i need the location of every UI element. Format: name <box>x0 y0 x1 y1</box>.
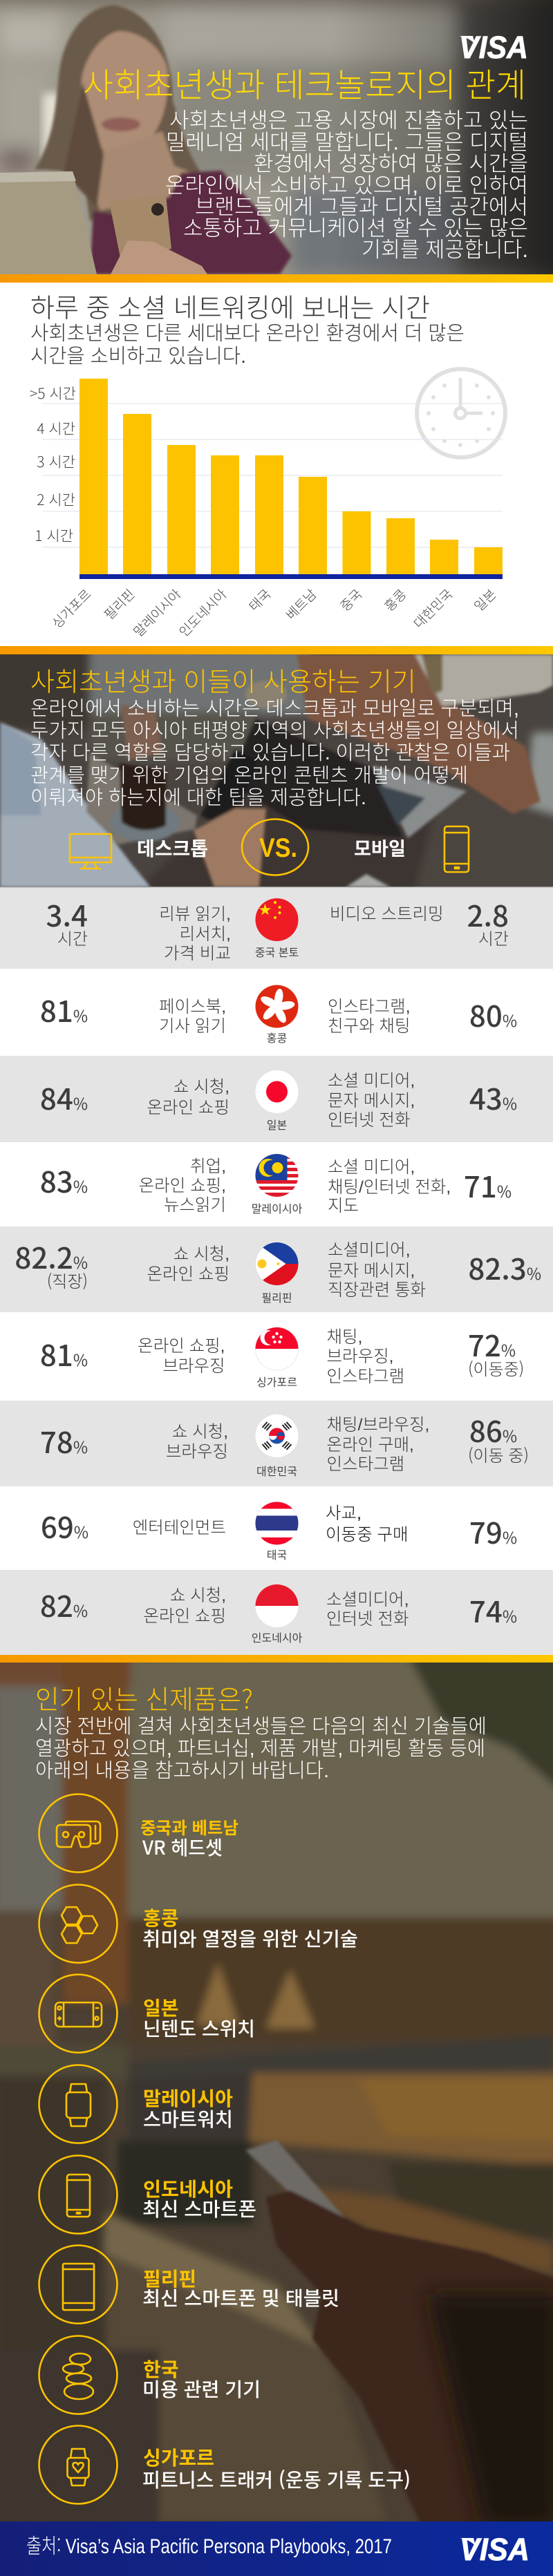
mobile uses: 채팅/브라우징, <box>326 1415 429 1434</box>
row: Singapore <box>41 1327 523 1388</box>
mobile uses: 이동중 구매 <box>326 1526 409 1544</box>
icon: desktop monitor <box>70 834 111 869</box>
flag: Philippines <box>256 1242 299 1285</box>
body text: 두가지 모두 아시아 태평양 지역의 사회초년생들의 일상에서 <box>30 720 519 742</box>
heading: 인기 있는 신제품은? <box>35 1678 253 1716</box>
stat: desktop at work: 82.2% <box>15 1235 88 1278</box>
subheading text: 시간을 소비하고 있습니다. <box>30 345 246 368</box>
x axis country labels: 홍콩 <box>379 585 410 615</box>
mobile uses <box>328 1240 426 1300</box>
logo: Visa: VISA <box>459 30 528 65</box>
stat: mobile on the go: 72% <box>468 1323 516 1365</box>
desktop uses: 리서치, <box>180 925 231 944</box>
mobile uses: 인스타그램 <box>326 1455 404 1474</box>
icon: fitness band <box>68 2449 88 2485</box>
icon: clock <box>417 369 505 457</box>
item: latest smartphone <box>39 2156 256 2233</box>
row: Japan <box>0 1056 553 1142</box>
row: mainland China <box>0 888 553 969</box>
panel: time spent on social networking <box>0 283 553 646</box>
icon: smartphone <box>67 2175 90 2217</box>
desktop uses: 온라인 쇼핑 <box>147 1098 229 1117</box>
products photo background <box>0 1655 553 2529</box>
label: 일본 <box>267 1116 287 1133</box>
body text: 아래의 내용을 참고하시기 바랍니다. <box>35 1760 329 1782</box>
icon: smartwatch <box>66 2084 91 2126</box>
desktop uses: 쇼 시청, <box>174 1245 229 1264</box>
y axis labels: 1 시간 <box>35 525 73 546</box>
panel: popular new products <box>0 1655 553 2529</box>
panel: hero <box>0 0 553 276</box>
text: 미용 관련 기기 <box>142 2375 261 2403</box>
label: 싱가포르 <box>256 1373 297 1390</box>
stat: desktop: 81% <box>40 1333 88 1375</box>
hero intro text <box>165 108 528 262</box>
hero intro text: 기회를 제공합니다. <box>362 238 528 262</box>
desktop uses <box>147 1245 229 1284</box>
desktop uses <box>166 1423 228 1461</box>
mobile uses <box>328 997 411 1036</box>
stat: mobile: 82.3% <box>468 1247 541 1289</box>
mobile uses: 사교, <box>326 1504 362 1523</box>
text <box>142 2264 339 2311</box>
stat: mobile: 79% <box>469 1510 517 1553</box>
stat: desktop: 81% <box>40 989 88 1031</box>
item: VR headset <box>39 1794 238 1873</box>
x axis country labels: 대한민국 <box>409 585 456 632</box>
stat: mobile on the go <box>468 1323 524 1380</box>
desktop uses: 쇼 시청, <box>172 1423 228 1441</box>
body text: 열광하고 있으며, 파트너십, 제품 개발, 마케팅 활동 등에 <box>35 1738 485 1760</box>
mobile uses: 채팅, <box>326 1328 362 1347</box>
y axis labels: >5 시간 <box>30 383 76 404</box>
desktop uses: 온라인 쇼핑, <box>139 1176 226 1195</box>
label: 대한민국 <box>256 1462 297 1479</box>
desktop uses: 리뷰 읽기, <box>159 905 231 924</box>
text: VR 헤드셋 <box>142 1833 223 1861</box>
x axis country labels: 베트남 <box>281 585 320 623</box>
x axis country labels <box>48 585 500 641</box>
desktop uses: 브라우징 <box>162 1356 225 1376</box>
devices photo background <box>0 646 553 895</box>
stat: mobile hours: 2.8 <box>467 893 509 936</box>
desktop uses: 엔터테인먼트 <box>133 1515 226 1539</box>
text <box>142 2355 261 2403</box>
item: beauty devices <box>39 2336 261 2414</box>
y axis labels: 4 시간 <box>37 418 75 439</box>
desktop uses: 쇼 시청, <box>174 1078 229 1097</box>
row: South Korea <box>0 1401 553 1486</box>
flag: China <box>256 898 299 941</box>
hero title: 사회초년생과 테크놀로지의 관계 <box>83 58 526 106</box>
x axis country labels: 태국 <box>244 585 274 615</box>
y axis labels: 3 시간 <box>37 451 75 472</box>
body text <box>35 1716 487 1782</box>
desktop uses <box>159 905 231 963</box>
label: 필리핀 <box>261 1289 292 1305</box>
text: 싱가포르 <box>143 2443 214 2471</box>
text: 피트니스 트래커 (운동 기록 도구) <box>142 2465 411 2493</box>
mobile uses: 채팅/인터넷 전화, <box>328 1177 451 1197</box>
heading: 사회초년생과 이들이 사용하는 기기 <box>30 661 416 699</box>
y axis labels <box>30 383 76 546</box>
mobile uses: 문자 메시지, <box>328 1262 415 1280</box>
heading: 하루 중 소셜 네트워킹에 보내는 시간 <box>30 287 430 325</box>
mobile uses: 인스타그램, <box>328 997 411 1016</box>
stat: desktop: 78% <box>40 1420 88 1462</box>
subheading text <box>30 323 465 368</box>
subheading text: 사회초년생은 다른 세대보다 온라인 환경에서 더 많은 <box>30 323 465 345</box>
stat: desktop hours: 3.4 <box>46 893 88 936</box>
desktop uses: 브라우징 <box>166 1442 228 1461</box>
stat: mobile: 43% <box>469 1077 517 1119</box>
stat: desktop hours: 시간 <box>57 925 88 949</box>
text <box>143 1993 255 2042</box>
row: Malaysia <box>41 1154 512 1214</box>
logo: Visa: VISA <box>460 2532 529 2567</box>
stat: mobile: 74% <box>469 1589 517 1631</box>
row: Indonesia <box>0 1570 553 1655</box>
source text: 출처: Visa’s Asia Pacific Persona Playbooks, 2017 <box>26 2529 392 2559</box>
desktop uses: 페이스북, <box>159 998 226 1016</box>
stat: mobile on the go: 86% <box>469 1409 517 1451</box>
icon: VR headset <box>57 1821 100 1847</box>
mobile uses: 인터넷 전화 <box>326 1609 409 1629</box>
panel: footer <box>0 2521 553 2576</box>
stat: desktop: 82% <box>40 1584 88 1626</box>
label: 홍콩 <box>267 1029 287 1045</box>
desktop uses <box>143 1587 226 1626</box>
x axis country labels: 말레이시아 <box>129 585 185 641</box>
stat: desktop: 84% <box>40 1077 88 1119</box>
label: desktop: 데스크톱 <box>137 834 208 862</box>
x axis country labels: 필리핀 <box>100 585 138 623</box>
mobile uses: 소셜미디어, <box>328 1240 411 1260</box>
stat: desktop: 69% <box>41 1505 88 1547</box>
text <box>140 1815 238 1861</box>
text: 닌텐도 스위치 <box>143 2014 255 2042</box>
body text: 각자 다른 역할을 담당하고 있습니다. 이러한 관찰은 이들과 <box>30 741 510 764</box>
text <box>143 2084 233 2132</box>
label: 태국 <box>267 1546 287 1562</box>
flag: Hong Kong <box>256 985 299 1028</box>
icon: tablet <box>63 2264 94 2310</box>
text: 홍콩 <box>143 1904 179 1931</box>
mobile uses: 인스타그램 <box>326 1367 404 1386</box>
stat: mobile on the go <box>468 1409 529 1466</box>
text: 필리핀 <box>143 2264 196 2292</box>
mobile uses: 소셜 미디어, <box>328 1157 415 1177</box>
desktop uses: 온라인 쇼핑, <box>138 1336 225 1356</box>
mobile uses: 인터넷 전화 <box>328 1110 411 1130</box>
body text: 시장 전반에 걸쳐 사회초년생들은 다음의 최신 기술들에 <box>35 1716 487 1738</box>
mobile uses: 소셜 미디어, <box>328 1071 415 1090</box>
mobile uses: 비디오 스트리밍 <box>330 901 444 925</box>
row: Thailand <box>42 1502 517 1560</box>
text <box>142 1904 358 1952</box>
text: 최신 스마트폰 및 태블릿 <box>142 2284 339 2311</box>
mobile uses <box>326 1415 429 1474</box>
desktop uses: 뉴스읽기 <box>164 1195 226 1215</box>
body text: 관계를 맺기 위한 기업의 온라인 콘텐츠 개발이 어떻게 <box>30 765 468 787</box>
hero intro text: 브랜드들에게 그들과 디지털 공간에서 <box>195 195 528 219</box>
row: Hong Kong <box>41 985 517 1043</box>
mobile uses: 친구와 채팅 <box>328 1016 411 1036</box>
hero intro text: 소통하고 커뮤니케이션 할 수 있는 많은 <box>183 216 528 240</box>
stat: mobile: 80% <box>469 994 517 1036</box>
text: 스마트워치 <box>143 2105 233 2132</box>
stat: desktop at work: (직장) <box>47 1268 88 1292</box>
badge: VS: VS. <box>259 833 297 863</box>
item: smartwatch <box>39 2065 233 2143</box>
label: 말레이시아 <box>252 1200 303 1216</box>
label: 인도네시아 <box>252 1629 303 1645</box>
flag: Malaysia <box>256 1154 299 1197</box>
label: 중국 본토 <box>255 943 299 960</box>
mobile uses: 브라우징, <box>326 1347 393 1366</box>
panel: devices intro <box>0 646 553 895</box>
mobile uses: 직장관련 통화 <box>328 1281 426 1300</box>
item: fitness tracker <box>39 2425 411 2504</box>
icon: game console <box>55 2002 102 2027</box>
bar chart <box>30 379 503 641</box>
flag: South Korea <box>256 1414 299 1457</box>
desktop uses: 온라인 쇼핑 <box>147 1265 229 1284</box>
text <box>142 2175 256 2222</box>
flag: Singapore <box>256 1327 299 1370</box>
body text <box>30 698 519 809</box>
body text: 온라인에서 소비하는 시간은 데스크톱과 모바일로 구분되며, <box>30 698 519 720</box>
desktop uses: 가격 비교 <box>164 945 231 963</box>
mobile uses <box>328 1071 415 1130</box>
hero photo background <box>0 0 553 276</box>
desktop uses <box>147 1078 229 1117</box>
text <box>142 2443 411 2493</box>
badge: VS <box>242 820 308 875</box>
mobile uses: 지도 <box>328 1197 359 1215</box>
stat: mobile hours: 시간 <box>478 925 509 949</box>
row: Philippines <box>0 1227 553 1312</box>
desktop uses: 쇼 시청, <box>170 1587 226 1605</box>
stat: mobile on the go: (이동중) <box>468 1356 524 1380</box>
text: 최신 스마트폰 <box>142 2195 256 2222</box>
mobile uses <box>326 1504 409 1544</box>
text: 일본 <box>143 1993 179 2021</box>
x axis country labels: 인도네시아 <box>174 585 230 641</box>
item: Nintendo Switch <box>39 1975 255 2052</box>
icon: mobile phone <box>444 826 469 872</box>
x axis country labels: 일본 <box>469 585 500 615</box>
icon: hexagons <box>62 1907 97 1943</box>
desktop uses: 기사 읽기 <box>159 1016 226 1036</box>
stat: mobile on the go: (이동 중) <box>468 1442 529 1466</box>
flag: Thailand <box>256 1502 299 1545</box>
body text: 이뤄져야 하는지에 대한 팁을 제공합니다. <box>30 787 366 809</box>
text: 한국 <box>143 2355 179 2383</box>
flag: Japan <box>256 1070 299 1113</box>
desktop uses: 취업, <box>190 1157 226 1176</box>
mobile uses <box>326 1328 404 1386</box>
x axis country labels: 싱가포르 <box>48 585 95 632</box>
text: 말레이시아 <box>143 2084 233 2112</box>
desktop uses: 온라인 쇼핑 <box>143 1607 226 1626</box>
label: mobile: 모바일 <box>354 834 406 861</box>
hero intro text: 온라인에서 소비하고 있으며, 이로 인하여 <box>165 173 528 198</box>
hero intro text: 환경에서 성장하여 많은 시간을 <box>254 152 528 176</box>
item: smartphones and tablets <box>39 2246 339 2323</box>
hero intro text: 밀레니엄 세대를 말합니다. 그들은 디지털 <box>166 130 528 155</box>
stat: desktop: 83% <box>40 1159 88 1202</box>
y axis labels: 2 시간 <box>37 489 75 510</box>
icon: stones <box>63 2354 93 2399</box>
text: 취미와 열정을 위한 신기술 <box>142 1924 358 1952</box>
desktop uses <box>159 998 226 1036</box>
stat: mobile: 71% <box>464 1164 512 1206</box>
mobile uses <box>328 1157 451 1215</box>
mobile uses: 문자 메시지, <box>328 1092 415 1110</box>
mobile uses <box>326 1590 409 1629</box>
text: 인도네시아 <box>143 2175 233 2202</box>
mobile uses: 온라인 구매, <box>326 1435 414 1455</box>
x axis country labels: 중국 <box>335 585 366 615</box>
flag: Indonesia <box>256 1584 299 1627</box>
text: 중국과 베트남 <box>140 1815 238 1839</box>
desktop uses <box>138 1336 225 1376</box>
desktop uses <box>139 1157 226 1215</box>
panel: desktop vs mobile by market <box>0 888 553 1655</box>
mobile uses: 소셜미디어, <box>326 1590 409 1609</box>
item: gadgets for hobbies <box>39 1885 358 1962</box>
hero intro text: 사회초년생은 고용 시장에 진출하고 있는 <box>169 108 528 133</box>
